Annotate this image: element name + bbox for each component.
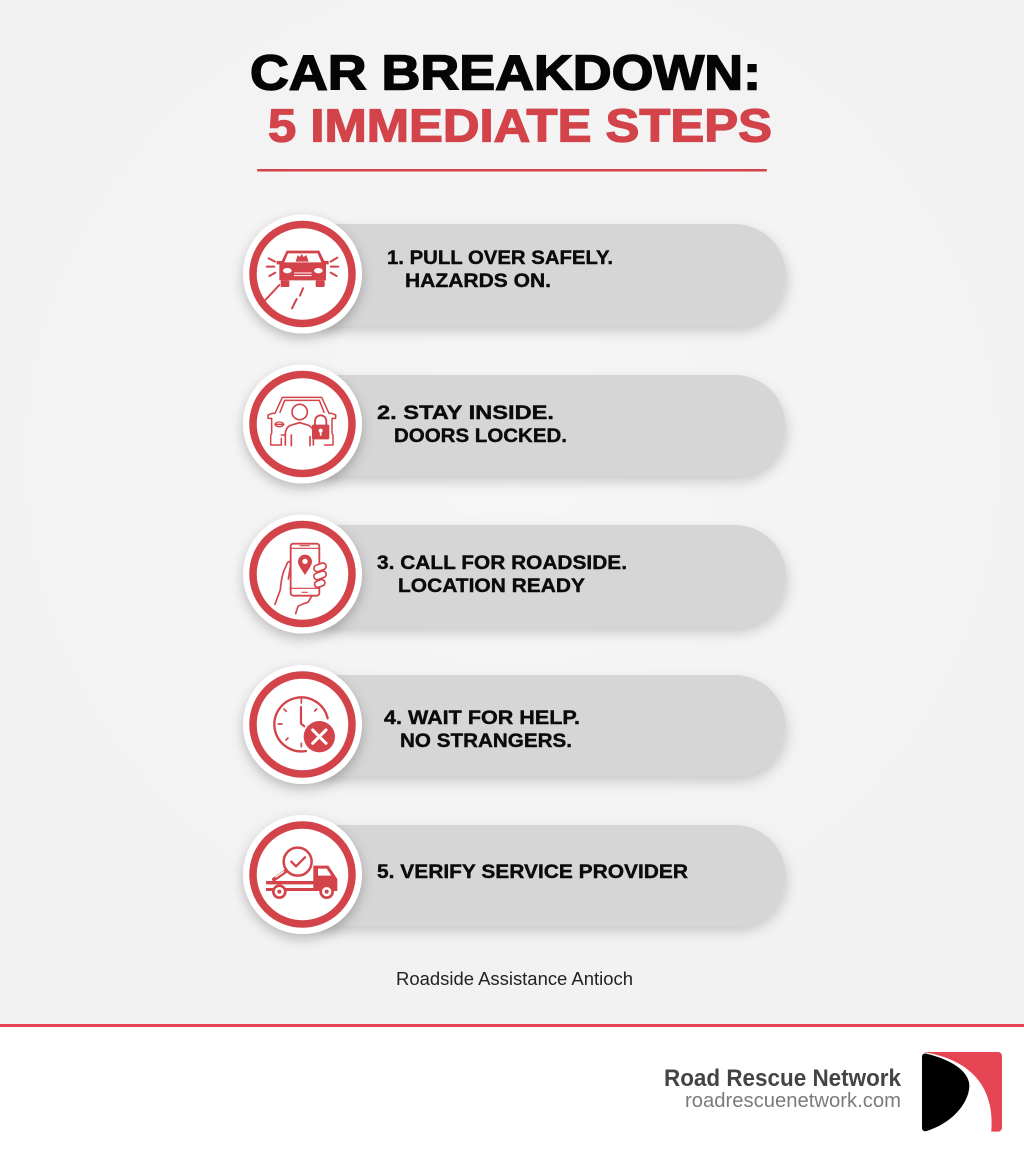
logo	[922, 1052, 1002, 1132]
step 2 badge	[243, 364, 362, 484]
step 1 text	[387, 247, 613, 292]
step 3 text: LOCATION READY	[398, 575, 585, 597]
step 5	[243, 815, 785, 934]
title	[250, 46, 772, 152]
footer	[0, 1024, 1024, 1154]
title: CAR BREAKDOWN:	[250, 46, 761, 100]
step 5 text: 5. VERIFY SERVICE PROVIDER	[377, 861, 688, 883]
brand name: Road Rescue Network	[664, 1065, 902, 1092]
title underline	[257, 169, 767, 172]
step 4 pill	[320, 675, 785, 776]
step 5 badge	[243, 815, 362, 934]
step 3	[243, 514, 786, 634]
step 1 pill	[320, 224, 786, 326]
step 1	[243, 214, 786, 334]
step 4 text: 4. WAIT FOR HELP.	[384, 707, 580, 729]
step 2 text	[377, 402, 567, 447]
step 3 text	[377, 552, 627, 597]
icon: tow truck with magnifier check	[266, 848, 337, 898]
icon: person in car with padlock	[268, 397, 336, 446]
step 4 badge	[243, 665, 362, 784]
icon: car with hazards on road	[265, 251, 338, 308]
step 2 text: 2. STAY INSIDE.	[377, 402, 554, 424]
website: roadrescuenetwork.com	[685, 1090, 901, 1112]
step 1 text: HAZARDS ON.	[405, 270, 551, 292]
title: 5 IMMEDIATE STEPS	[268, 100, 772, 152]
step 4 text: NO STRANGERS.	[400, 730, 572, 752]
step 3 badge	[243, 514, 362, 634]
step 1 badge	[243, 214, 362, 334]
step 2 text: DOORS LOCKED.	[394, 425, 567, 447]
step 2 pill	[320, 375, 785, 476]
step 1 text: 1. PULL OVER SAFELY.	[387, 247, 613, 269]
step 3 pill	[320, 525, 786, 627]
step 3 text: 3. CALL FOR ROADSIDE.	[377, 552, 627, 574]
step 2	[243, 364, 785, 484]
step 4	[243, 665, 785, 784]
caption: Roadside Assistance Antioch	[396, 969, 633, 989]
icon: clock with X	[274, 697, 335, 752]
step 5 pill	[320, 825, 785, 926]
icon: hand holding phone with location pin	[275, 544, 327, 614]
step 4 text	[384, 707, 580, 752]
